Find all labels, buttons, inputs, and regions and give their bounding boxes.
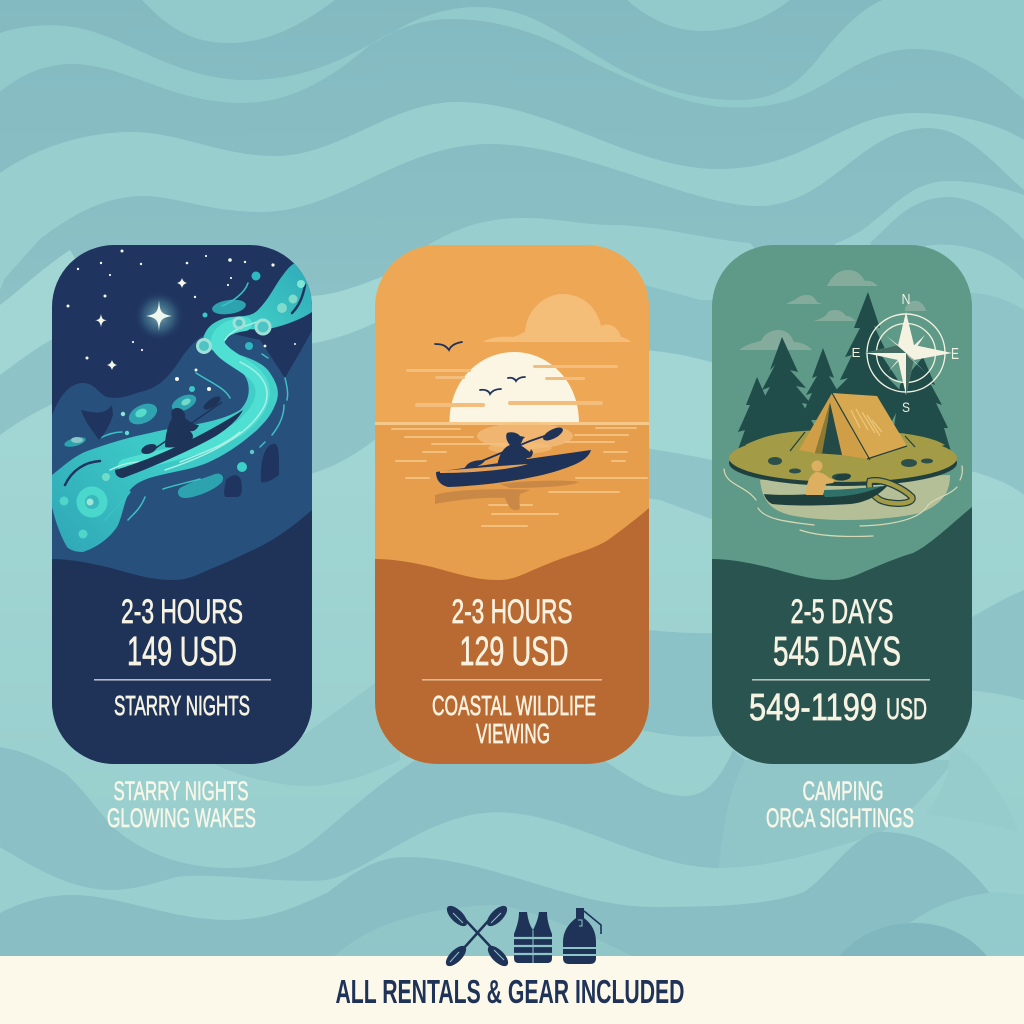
- card: sunset coastal tour: [375, 245, 649, 764]
- sun streaks: [375, 365, 649, 425]
- caption: night tour: STARRY NIGHTS: [114, 776, 248, 806]
- card 1 text: [114, 593, 250, 721]
- foreground panel: [375, 508, 649, 764]
- kayaker silhouette: [115, 394, 243, 478]
- birds: [435, 342, 525, 394]
- footer text: ALL RENTALS & GEAR INCLUDED: [336, 973, 684, 1010]
- reflection pool: [760, 475, 950, 520]
- compass: E: [852, 345, 861, 360]
- kayaker: [436, 425, 591, 487]
- compass: E: [951, 346, 959, 363]
- lower sea: [0, 747, 745, 890]
- feature line two: VIEWING: [476, 718, 550, 749]
- clouds: [739, 270, 926, 350]
- island: [729, 460, 957, 486]
- caption: night tour: [107, 776, 256, 833]
- price: 129 USD: [460, 628, 568, 674]
- card: camping expedition: [712, 245, 972, 764]
- caption: camping tour: ORCA SIGHTINGS: [766, 803, 914, 833]
- days: 545 DAYS: [773, 628, 901, 674]
- card: bioluminescent night tour: [52, 245, 312, 764]
- icon: crossed paddles: [443, 903, 511, 969]
- water reflections: [391, 423, 648, 527]
- reflection: [435, 489, 530, 510]
- feature: COASTAL WILDLIFE: [432, 690, 596, 721]
- water ripples: [724, 466, 962, 536]
- price range: 549-1199: [749, 687, 877, 729]
- dark rocks: [81, 405, 113, 440]
- stars: [66, 250, 296, 391]
- glowing blobs and rings: [60, 272, 305, 538]
- duration: 2-5 DAYS: [790, 593, 894, 631]
- pine trees: [735, 292, 952, 460]
- night hill: [52, 330, 312, 600]
- feature: STARRY NIGHTS: [114, 690, 250, 721]
- icon: water bottle: [563, 908, 601, 964]
- caption: night tour: GLOWING WAKES: [107, 803, 256, 833]
- currency: USD: [886, 693, 927, 726]
- foreground panel: [712, 507, 972, 764]
- icon: life vest: [514, 912, 552, 963]
- card 2 text: [432, 593, 596, 749]
- caption: camping tour: [766, 776, 914, 833]
- caption: camping tour: CAMPING: [802, 776, 884, 806]
- compass: N: [902, 291, 910, 308]
- card 3 text: [749, 593, 927, 729]
- foreground dark panel: [52, 510, 312, 764]
- duration: 2-3 HOURS: [121, 593, 243, 631]
- cloud: [483, 294, 631, 342]
- sun: [449, 352, 579, 423]
- footer band: [0, 956, 1024, 1024]
- light middle sea: [0, 250, 1024, 960]
- compass: [852, 291, 959, 415]
- compass: S: [902, 399, 910, 415]
- tent: [790, 393, 915, 460]
- kayaker on inflatable: [764, 460, 912, 506]
- duration: 2-3 HOURS: [452, 593, 572, 631]
- glowing river: [52, 262, 312, 552]
- price: 149 USD: [127, 628, 237, 674]
